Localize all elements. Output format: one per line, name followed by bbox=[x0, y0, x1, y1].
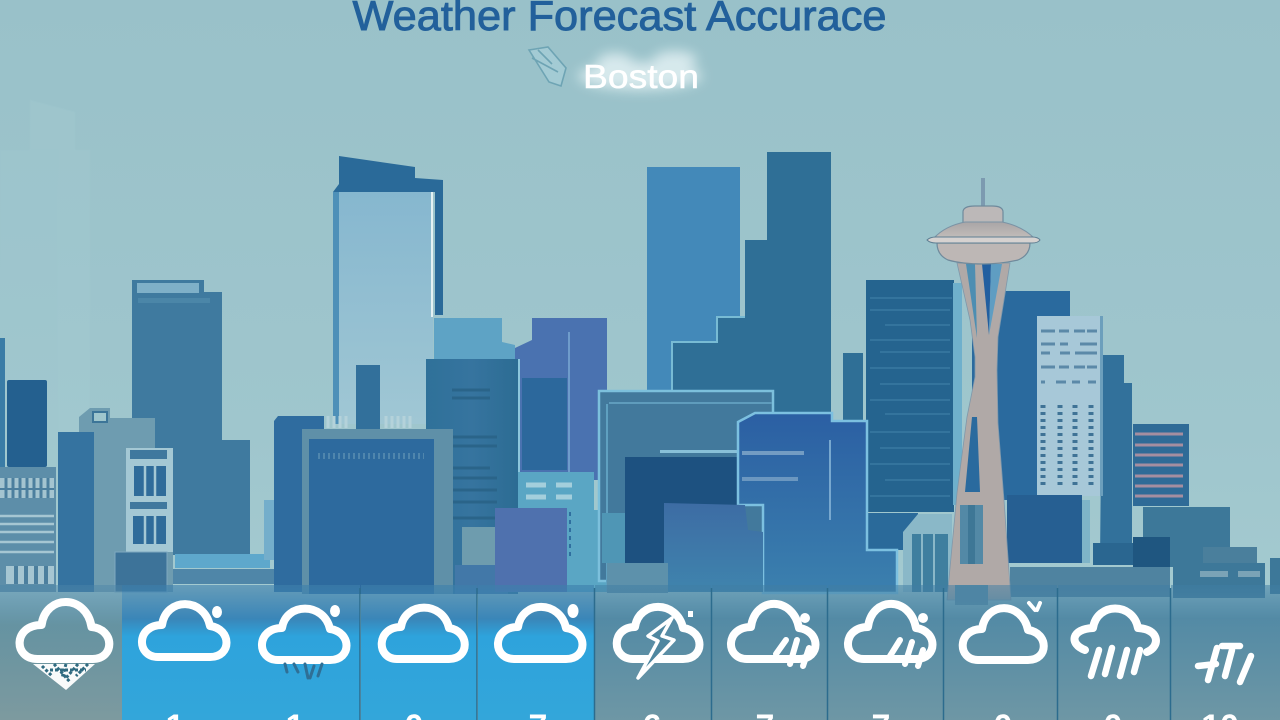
far-left slim tower bbox=[0, 338, 5, 468]
icon: cloud with snowy rain bbox=[20, 602, 109, 690]
striped dark blue tower bbox=[426, 359, 520, 594]
small teal annex bbox=[843, 353, 863, 423]
skyline: right buildings bbox=[903, 283, 1280, 598]
stepped dark teal tower bbox=[672, 152, 831, 420]
striped navy tower bbox=[866, 280, 954, 512]
blue office block bbox=[738, 413, 897, 593]
violet low building bbox=[495, 508, 567, 592]
needle shaft and struts bbox=[947, 263, 1011, 600]
pale columns block bbox=[903, 514, 952, 592]
needle saucer dome bbox=[934, 222, 1034, 238]
forecast column: blue 3 bbox=[361, 585, 477, 720]
forecast column: gray bbox=[0, 585, 122, 720]
teal side wall with windows bbox=[518, 472, 607, 592]
needle saucer underside bbox=[937, 243, 1030, 264]
daily values row bbox=[166, 708, 1239, 720]
icon: rain cloud B bbox=[848, 604, 932, 666]
street-level block bbox=[115, 552, 167, 592]
small roof tower bbox=[356, 365, 380, 430]
low front block bbox=[664, 503, 763, 592]
icon: rain cloud A bbox=[731, 604, 816, 666]
forecast column: teal 5 bbox=[1058, 585, 1170, 720]
needle saucer rim bbox=[927, 237, 1040, 243]
forecast strip bbox=[0, 585, 1280, 720]
dark lower annex bbox=[1093, 543, 1133, 565]
dark cluster bbox=[1133, 537, 1170, 585]
needle V gap light bbox=[989, 264, 1002, 335]
slim pale annex bbox=[264, 500, 274, 560]
blue low front building bbox=[455, 565, 508, 594]
subtitle text: Boston bbox=[583, 58, 699, 95]
icon: cloud with sparkle bbox=[963, 603, 1044, 660]
far-right stub bbox=[1270, 558, 1280, 594]
forecast column: blue 2 bbox=[239, 585, 360, 720]
grey-teal low building bbox=[462, 527, 496, 565]
back wide tower bbox=[647, 167, 740, 392]
low window building bbox=[1173, 547, 1265, 598]
needle window mullion bbox=[968, 505, 975, 564]
pale edge strip bbox=[1082, 500, 1090, 563]
roof railings bbox=[328, 416, 410, 428]
needle top cap bbox=[963, 206, 1003, 225]
navy lower block bbox=[868, 513, 918, 550]
icon: cloud with faint rain bbox=[262, 605, 346, 678]
grey-blue mid building with windows bbox=[58, 408, 173, 592]
ghost tower in the haze bbox=[0, 100, 90, 470]
pale strip beside tower bbox=[953, 283, 962, 505]
stepped tower edge line bbox=[672, 317, 745, 391]
light window-grid tower bbox=[1037, 316, 1103, 496]
needle lower gap bbox=[965, 417, 980, 492]
forecast column: teal 4 bbox=[944, 585, 1057, 720]
needle V gap dark bbox=[982, 264, 991, 335]
icon: heavy rain cloud bbox=[1075, 608, 1156, 676]
icon: cloud with sun dot 2 bbox=[498, 604, 582, 659]
icon: rain streaks bbox=[1198, 646, 1251, 682]
broad grey-blue building bbox=[1143, 507, 1230, 567]
street-level slab bbox=[150, 569, 287, 584]
pale front stub bbox=[607, 563, 668, 593]
forecast column: teal 2 bbox=[712, 585, 827, 720]
forecast column: blue 1 bbox=[122, 585, 239, 720]
icon: plain cloud bbox=[382, 608, 465, 659]
purple-blue tower bbox=[515, 318, 607, 480]
forecast column: teal 1 bbox=[595, 585, 711, 720]
ground podium bbox=[1010, 567, 1170, 597]
subtitle map icon bbox=[529, 47, 566, 86]
forecast column: teal 3 bbox=[828, 585, 943, 720]
light-blue rooftop block bbox=[434, 318, 515, 362]
icon: cloud with sun dot 1 bbox=[142, 604, 226, 657]
tall blue tower behind needle bbox=[972, 291, 1070, 500]
space needle bbox=[927, 178, 1040, 605]
subtitle cloud glow bbox=[578, 51, 702, 90]
needle left sliver gap bbox=[966, 264, 977, 338]
dark low block bbox=[1007, 495, 1082, 563]
needle antenna bbox=[981, 178, 985, 206]
weather icons bbox=[20, 602, 1251, 690]
tall tower with stepped base bbox=[132, 280, 250, 555]
needle base opening bbox=[955, 585, 988, 605]
forecast column: teal 6 bbox=[1171, 585, 1280, 720]
forecast column: blue 4 bbox=[478, 585, 594, 720]
needle window frame bbox=[960, 505, 983, 564]
icon: thunderstorm cloud bbox=[617, 607, 700, 678]
subtitle: location badge bbox=[529, 47, 702, 95]
large square building bbox=[274, 416, 453, 594]
stepped teal building bbox=[1100, 355, 1132, 560]
skyline: left and centre buildings bbox=[0, 152, 954, 594]
pale plaza strip bbox=[175, 554, 270, 568]
pink-striped building bbox=[1133, 424, 1189, 506]
open-frame building with dark core bbox=[599, 391, 773, 592]
glass tower with dark cap bbox=[333, 156, 443, 424]
dark block bbox=[7, 380, 47, 467]
low striped building bbox=[0, 467, 56, 592]
